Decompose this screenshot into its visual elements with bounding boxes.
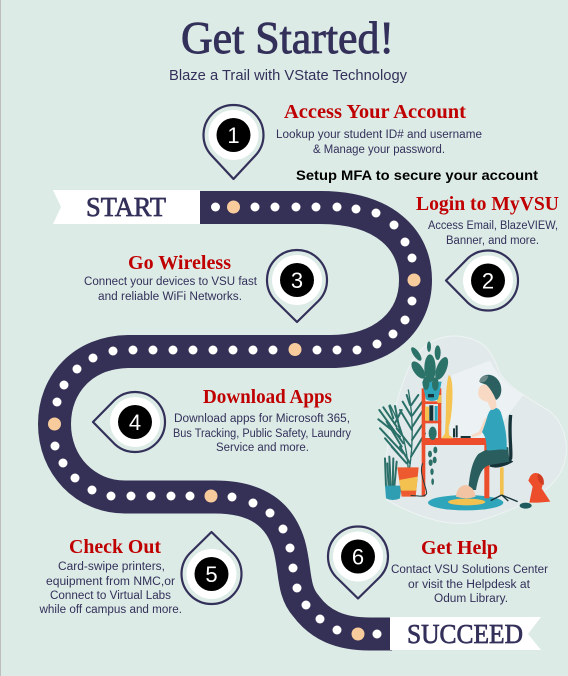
subtitle: Blaze a Trail with VState Technology (169, 67, 407, 84)
step 3 text: Connect your devices to VSU fast (84, 276, 258, 288)
pin 5 (182, 532, 242, 604)
step 1 text: Access Your Account (284, 101, 466, 123)
step 2 text: Access Email, BlazeVIEW, (428, 220, 558, 232)
step 2 text: Login to MyVSU (416, 193, 559, 215)
keyboard (461, 436, 471, 438)
pin 4: 4 (129, 410, 141, 435)
step 2 text (416, 193, 559, 247)
step 2 text: Banner, and more. (446, 235, 539, 247)
blue plant pot (422, 382, 442, 401)
pin 3 (267, 250, 327, 322)
step 1 text: & Manage your password. (313, 144, 445, 156)
step 3 text: Go Wireless (128, 252, 231, 274)
step 6 text: Get Help (421, 537, 498, 559)
road dots (50, 202, 416, 638)
pin 1: 1 (227, 123, 240, 148)
palm plant (378, 390, 425, 470)
dog (528, 473, 550, 503)
pin 1 (204, 105, 264, 179)
cable (411, 463, 427, 496)
step 3 text (84, 252, 258, 303)
pin 3: 3 (291, 268, 303, 293)
bowl (520, 503, 532, 509)
step 5 text: Check Out (69, 536, 161, 558)
illustration: person working at desk (378, 336, 566, 523)
step 4 text: Download apps for Microsoft 365, (174, 413, 350, 425)
start ribbon: START (86, 192, 166, 222)
step 1 text (276, 101, 482, 156)
pin 6 (328, 526, 388, 598)
step 5 text: equipment from NMC,or (46, 576, 175, 588)
red pot (397, 467, 419, 497)
step 5 text: Connect to Virtual Labs (50, 590, 171, 602)
person head (478, 383, 497, 410)
step 5 text: Card-swipe printers, (58, 561, 165, 573)
shelf books (429, 405, 433, 421)
step 4 text: Bus Tracking, Public Safety, Laundry (173, 428, 351, 440)
step 5 text (38, 536, 182, 616)
person legs (468, 447, 509, 490)
winding road (48, 200, 420, 640)
step 4 text: Download Apps (203, 386, 332, 408)
MFA callout: Setup MFA to secure your account (296, 168, 539, 183)
step 5 text: while off campus and more. (38, 604, 182, 616)
pens cup (454, 425, 457, 437)
step 6 text: or visit the Helpdesk at (408, 579, 531, 591)
step 4 text: Service and more. (216, 442, 309, 454)
step 6 text: Contact VSU Solutions Center (391, 564, 548, 576)
step 3 text: and reliable WiFi Networks. (98, 291, 242, 303)
red shelf and desk (422, 388, 489, 498)
step 6 text (391, 537, 548, 605)
pin 2: 2 (482, 268, 494, 294)
pin 2 (446, 250, 518, 310)
person torso and arm (482, 408, 507, 450)
pin 4 (93, 392, 165, 452)
step 1 text: Lookup your student ID# and username (276, 129, 482, 141)
small potted plant (385, 457, 402, 500)
pin 5: 5 (205, 562, 218, 587)
slippers (456, 485, 476, 498)
succeed ribbon: SUCCEED (407, 619, 523, 649)
step 6 text: Odum Library. (434, 593, 508, 605)
leafy plant (409, 341, 451, 391)
title: Get Started! (181, 12, 394, 63)
road milestones (48, 200, 420, 640)
start ribbon (53, 190, 200, 224)
step 4 text (173, 386, 351, 454)
hanging plant (428, 427, 437, 485)
chair (490, 415, 518, 502)
pin 6: 6 (352, 544, 364, 570)
monitor (442, 375, 453, 438)
floor rug (428, 495, 503, 510)
